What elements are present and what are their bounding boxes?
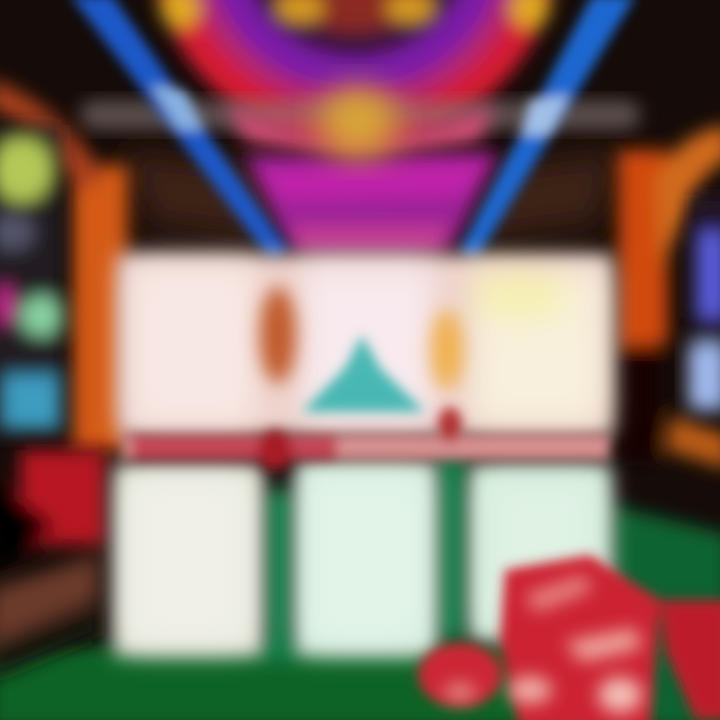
upper panel faces (128, 262, 605, 428)
icon: teal triangle logo (302, 335, 425, 412)
dice pips (444, 575, 642, 713)
lower panel faces (125, 472, 602, 645)
panel: lower display panels (115, 462, 610, 655)
gold ornament (318, 86, 398, 158)
panel: ceiling (70, 0, 640, 262)
backing of upper panels (118, 255, 612, 435)
panel: upper display panels (118, 255, 612, 435)
dice bodies (418, 555, 720, 720)
panel: green floor (0, 455, 720, 720)
pink band under rings (225, 105, 495, 152)
blue beam left (70, 0, 288, 262)
ceiling rings (150, 0, 560, 145)
orange figures (260, 287, 463, 390)
panel: right orange pillar (618, 125, 720, 470)
panel: lower left red seating (0, 450, 105, 680)
brown ceiling sides (120, 150, 620, 245)
panel: right screen (688, 195, 720, 415)
backing of lower panels (115, 462, 610, 655)
red ribbon band (122, 407, 610, 470)
icon: red dice (418, 555, 720, 720)
blue beam right (460, 0, 636, 262)
panel: left screen (0, 125, 64, 435)
panel: left orange pillar (0, 78, 128, 450)
magenta ceiling band (245, 152, 500, 255)
grey horizontal band (80, 100, 640, 130)
